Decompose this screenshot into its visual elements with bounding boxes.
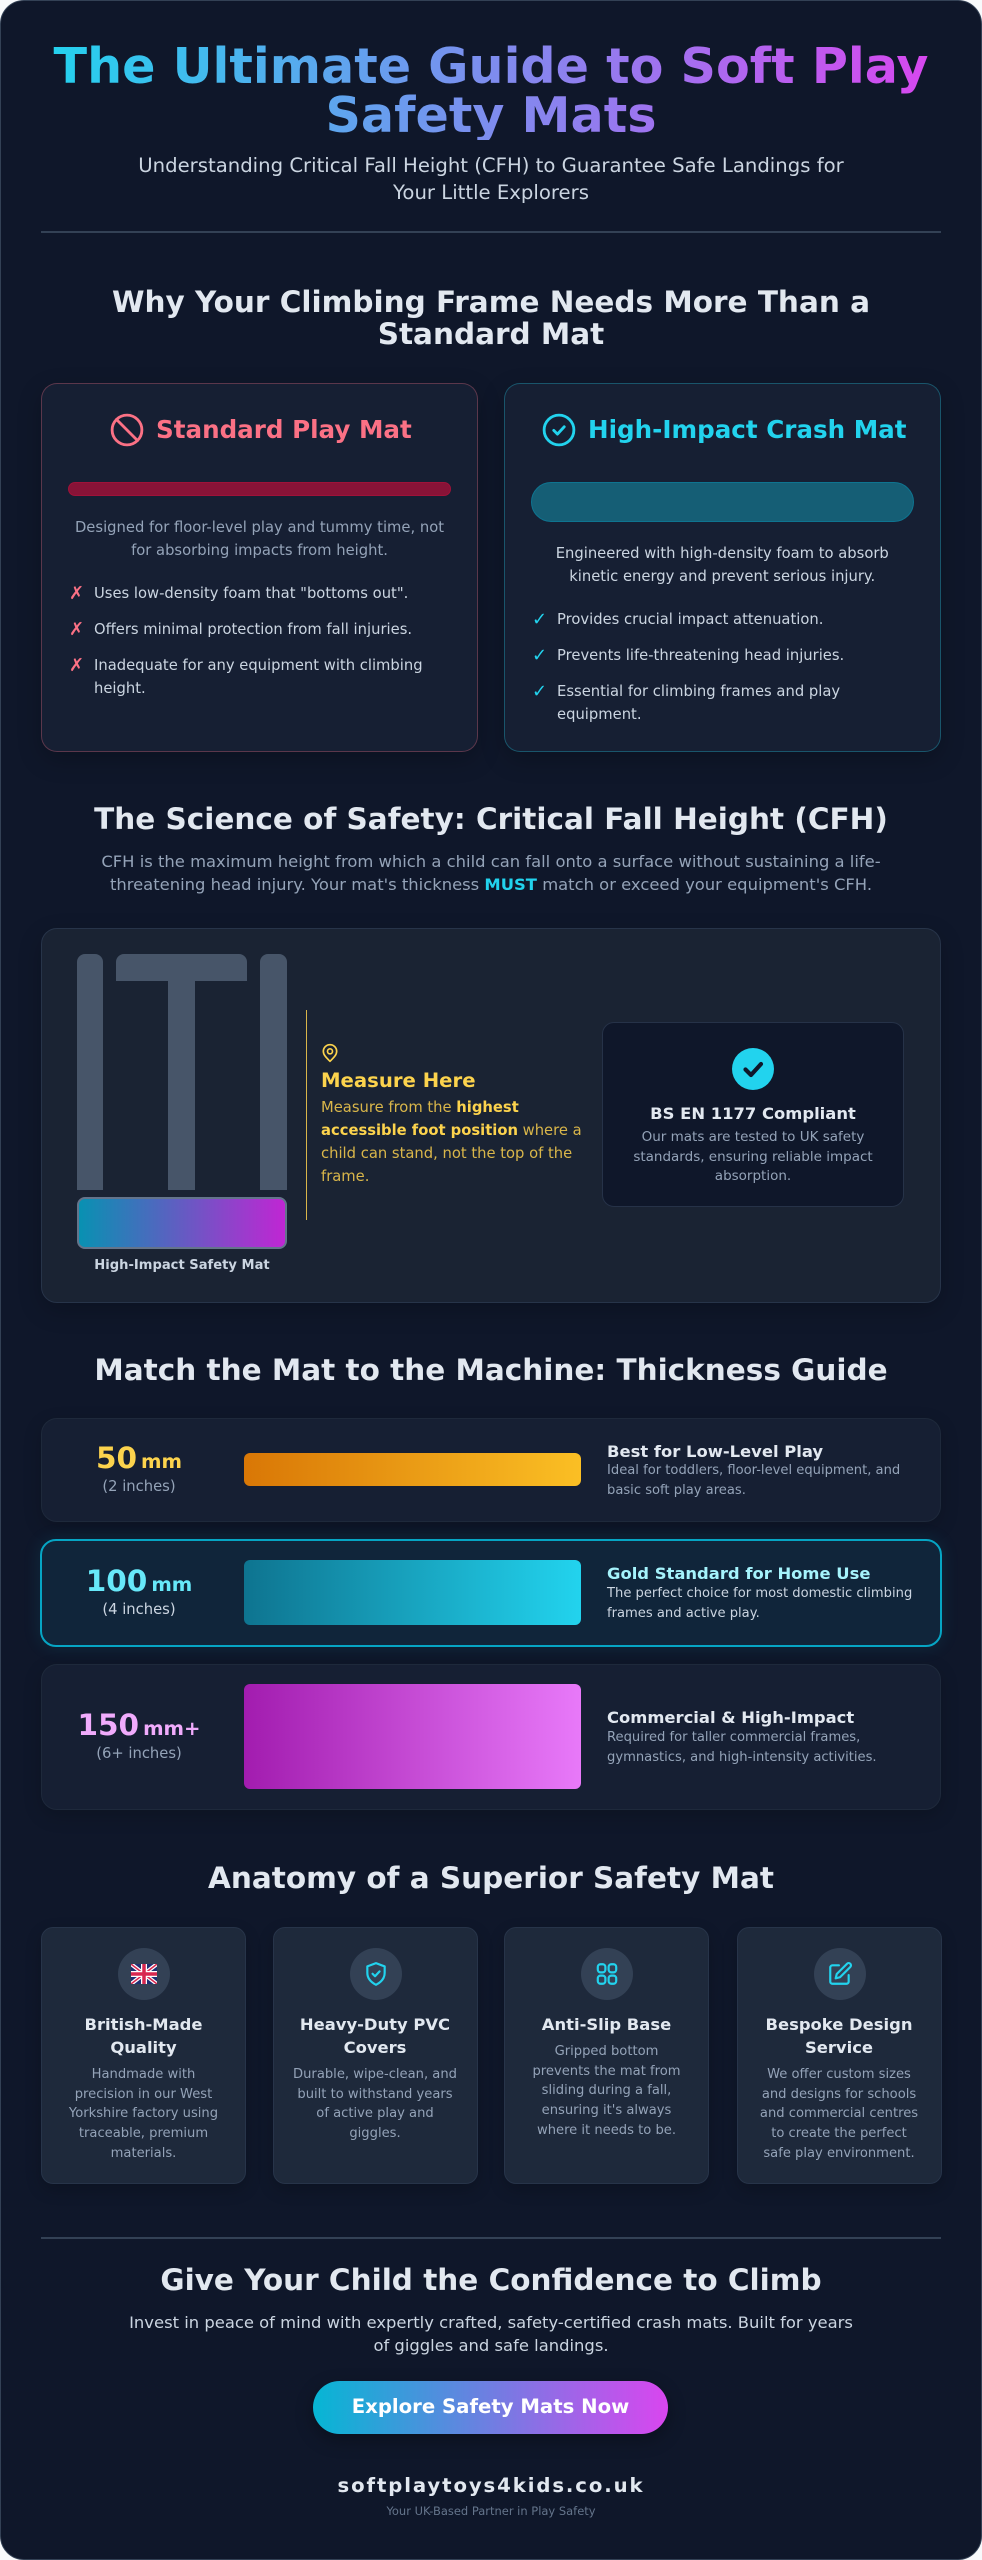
description: of active play and: [316, 2106, 434, 2121]
use title: Gold Standard for Home Use: [607, 1564, 870, 1583]
title: Heavy-Duty PVC: [300, 2015, 450, 2034]
use description: [607, 1463, 900, 1498]
description: materials.: [111, 2146, 176, 2161]
title: Quality: [110, 2038, 177, 2057]
list: Uses low-density foam that "bottoms out".: [94, 585, 408, 602]
icon circle: grid: [581, 1948, 633, 2000]
heading: anatomy: Anatomy of a Superior Safety Mat: [208, 1861, 774, 1895]
description: ensuring it's always: [542, 2103, 671, 2118]
use description: [607, 1730, 877, 1765]
subtitle: Your Little Explorers: [393, 181, 589, 204]
use description: gymnastics, and high-intensity activities.: [607, 1750, 877, 1765]
description: [75, 519, 444, 559]
title: [766, 2015, 912, 2057]
list: Provides crucial impact attenuation.: [557, 611, 823, 628]
climbing frame illustration: [77, 954, 287, 1190]
icon: map pin: [322, 1044, 338, 1062]
tagline: Your UK-Based Partner in Play Safety: [386, 2504, 596, 2518]
body: standards, ensuring reliable impact: [633, 1148, 873, 1164]
bar: 150mm: [244, 1684, 581, 1789]
description: [293, 2067, 457, 2141]
item: ✗: [69, 619, 84, 640]
list: height.: [94, 680, 146, 697]
row: 50mm: [41, 1418, 941, 1522]
icon circle: flag: [118, 1948, 170, 2000]
heading: why: [112, 285, 870, 351]
row: 150mm: [41, 1664, 941, 1810]
panel: standard play mat: [41, 383, 478, 752]
description: [556, 545, 889, 585]
science description: CFH is the maximum height from which a child can fall onto a surface without sustaining a life-: [101, 852, 881, 871]
description: and commercial centres: [760, 2106, 918, 2121]
description: traceable, premium: [79, 2126, 208, 2141]
mat label: High-Impact Safety Mat: [94, 1258, 270, 1273]
icon: check badge: [732, 1048, 774, 1090]
list: Inadequate for any equipment with climbing: [94, 657, 423, 674]
icon circle: shield: [350, 1948, 402, 2000]
description: [532, 2044, 681, 2138]
description: [69, 2067, 218, 2161]
item: ✗: [69, 583, 84, 604]
heading: BS EN 1177 Compliant: [650, 1104, 856, 1123]
heading: cta: Give Your Child the Confidence to Climb: [160, 2263, 822, 2297]
cta description: of giggles and safe landings.: [373, 2336, 609, 2355]
description: safe play environment.: [763, 2146, 915, 2161]
use description: basic soft play areas.: [607, 1483, 746, 1498]
icon: circle check: [542, 414, 576, 446]
icon circle: edit: [814, 1948, 866, 2000]
thickness value 150mm: 150mm+: [77, 1708, 201, 1742]
body: frame.: [321, 1168, 369, 1185]
description: and designs for schools: [762, 2087, 916, 2102]
list: Essential for climbing frames and play: [557, 683, 840, 700]
feature: pvc covers: [272, 1927, 478, 2184]
description: precision in our West: [75, 2087, 212, 2102]
item: ✓: [532, 645, 547, 666]
description: We offer custom sizes: [767, 2067, 911, 2082]
body: Measure from the highest: [321, 1099, 519, 1116]
description: [760, 2067, 918, 2161]
use title: Commercial & High-Impact: [607, 1708, 854, 1727]
heading: why: Standard Mat: [378, 317, 604, 351]
cta button: [313, 2381, 668, 2434]
list: equipment.: [557, 706, 642, 723]
item: ✗: [69, 655, 84, 676]
list: Offers minimal protection from fall injuries.: [94, 621, 412, 638]
body: [633, 1129, 873, 1184]
feature: anti-slip: [504, 1927, 709, 2184]
cta description: [129, 2313, 853, 2355]
description: where it needs to be.: [537, 2123, 676, 2138]
inches: (2 inches): [102, 1478, 176, 1495]
heading: why: Why Your Climbing Frame Needs More Than a: [112, 285, 870, 319]
title: [300, 2015, 450, 2057]
list: [532, 609, 844, 723]
panel: high-impact crash mat: [504, 383, 941, 752]
heading: Measure Here: [321, 1069, 476, 1092]
description: Gripped bottom: [555, 2044, 658, 2059]
cta description: Invest in peace of mind with expertly crafted, safety-certified crash mats. Built for years: [129, 2313, 853, 2332]
body: child can stand, not the top of the: [321, 1145, 572, 1162]
cta button: Explore Safety Mats Now: [352, 2395, 629, 2418]
title: [41, 42, 941, 140]
description: kinetic energy and prevent serious injury.: [569, 568, 875, 585]
bar: 100mm: [244, 1560, 581, 1625]
body: absorption.: [715, 1168, 791, 1184]
body: Our mats are tested to UK safety: [642, 1129, 864, 1145]
use description: Required for taller commercial frames,: [607, 1730, 860, 1745]
heading: High-Impact Crash Mat: [588, 415, 907, 444]
title: Bespoke Design: [766, 2015, 912, 2034]
feature: british-made: [41, 1927, 246, 2184]
title: [84, 2015, 202, 2057]
science description: [101, 852, 881, 894]
compliance card: [602, 1022, 904, 1207]
title: Safety Mats: [325, 86, 656, 144]
body: [321, 1099, 582, 1185]
use description: frames and active play.: [607, 1606, 760, 1621]
description: Yorkshire factory using: [69, 2106, 218, 2121]
title: Covers: [344, 2038, 406, 2057]
measure here note: [321, 1044, 582, 1185]
description: sliding during a fall,: [542, 2083, 671, 2098]
thickness value 50mm: 50mm: [96, 1441, 182, 1475]
subtitle: [138, 154, 844, 204]
heading: science: The Science of Safety: Critical Fall Height (CFH): [94, 802, 888, 836]
use description: Ideal for toddlers, floor-level equipment, and: [607, 1463, 900, 1478]
thin mat bar: [68, 482, 451, 496]
item: ✓: [532, 609, 547, 630]
list: Prevents life-threatening head injuries.: [557, 647, 844, 664]
description: Handmade with: [92, 2067, 195, 2082]
description: built to withstand years: [297, 2087, 453, 2102]
thickness value 100mm: 100mm: [86, 1564, 192, 1598]
use description: [606, 1586, 912, 1621]
title: British-Made: [84, 2015, 202, 2034]
bar: 50mm: [244, 1453, 581, 1486]
description: for absorbing impacts from height.: [131, 542, 388, 559]
thick mat bar: [531, 482, 914, 522]
list: [69, 583, 423, 697]
feature: bespoke: [736, 1927, 942, 2184]
title: The Ultimate Guide to Soft Play: [54, 37, 928, 95]
icon: ban: [110, 414, 144, 446]
description: to create the perfect: [771, 2126, 907, 2141]
inches: (6+ inches): [96, 1745, 182, 1762]
description: Designed for floor-level play and tummy time, not: [75, 519, 444, 536]
row: 100mm: [40, 1539, 942, 1647]
description: Engineered with high-density foam to absorb: [556, 545, 889, 562]
use description: The perfect choice for most domestic climbing: [607, 1586, 912, 1601]
description: Durable, wipe-clean, and: [293, 2067, 457, 2082]
inches: (4 inches): [102, 1601, 176, 1618]
brand url: softplaytoys4kids.co.uk: [338, 2474, 644, 2497]
subtitle: Understanding Critical Fall Height (CFH) to Guarantee Safe Landings for: [138, 154, 844, 177]
safety mat: [77, 1197, 287, 1249]
body: accessible foot position where a: [321, 1122, 582, 1139]
heading: thickness guide: Match the Mat to the Machine: Thickness Guide: [94, 1353, 888, 1387]
item: ✓: [532, 681, 547, 702]
use title: Best for Low-Level Play: [607, 1442, 823, 1461]
science description: threatening head injury. Your mat's thickness MUST match or exceed your equipment's CFH.: [110, 875, 872, 894]
panel: CFH diagram: [41, 928, 941, 1303]
description: prevents the mat from: [532, 2064, 681, 2079]
heading: Standard Play Mat: [156, 415, 412, 444]
title: Anti-Slip Base: [542, 2015, 671, 2034]
title: Service: [805, 2038, 873, 2057]
description: giggles.: [349, 2126, 401, 2141]
